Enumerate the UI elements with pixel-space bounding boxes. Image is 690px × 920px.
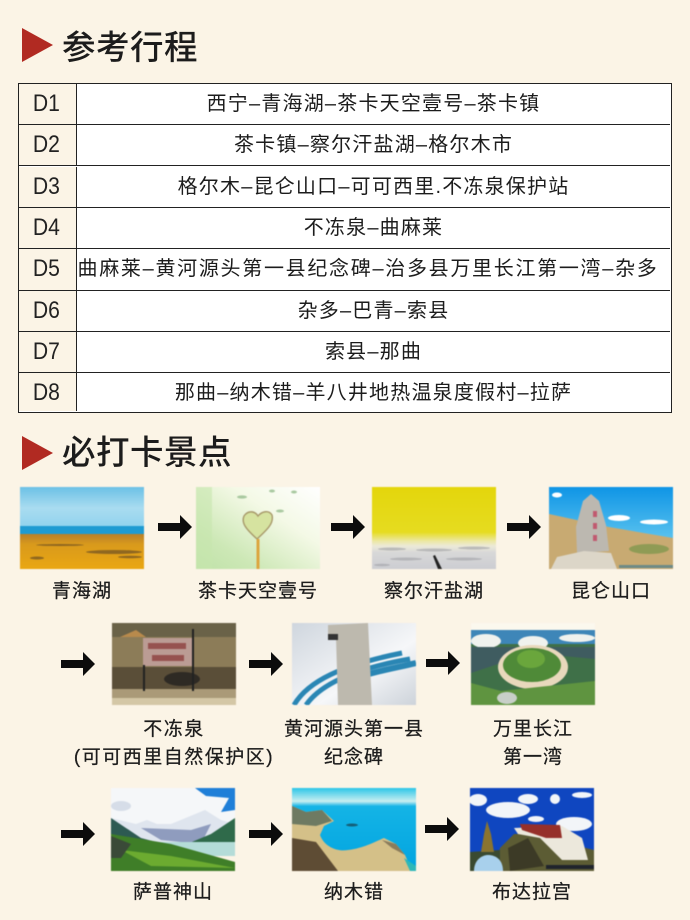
spot: 昆仑山口: 昆仑山口 — [571, 581, 651, 602]
row D5 — [19, 249, 670, 291]
spot: 萨普神山 — [110, 787, 236, 903]
spot: 黄河源头第一县纪念碑 — [284, 622, 424, 768]
row D7 — [19, 332, 670, 373]
spot: 万里长江第一湾: 第一湾 — [503, 746, 563, 768]
arrow — [61, 822, 95, 846]
spot: 布达拉宫: 布达拉宫 — [492, 882, 572, 903]
spot: 察尔汗盐湖: 察尔汗盐湖 — [384, 581, 484, 602]
spot: 不冻泉 — [74, 622, 274, 768]
row D5: D5 — [32, 255, 60, 282]
row D3 — [19, 167, 670, 208]
spot: 黄河源头第一县纪念碑: 纪念碑 — [324, 746, 384, 768]
row D8: D8 — [32, 379, 60, 406]
spot: 昆仑山口 — [548, 486, 674, 602]
arrow — [331, 515, 365, 539]
spot: 察尔汗盐湖 — [371, 486, 497, 602]
row D6 — [19, 291, 670, 332]
arrow — [507, 515, 541, 539]
row D2: D2 — [32, 131, 60, 158]
arrow — [249, 652, 283, 676]
row D4: 不冻泉–曲麻莱 — [304, 217, 443, 239]
row D4 — [19, 208, 670, 249]
spot: 萨普神山: 萨普神山 — [133, 882, 213, 903]
row D6: 杂多–巴青–索县 — [298, 300, 449, 322]
row D7: D7 — [32, 338, 60, 365]
spot: 茶卡天空壹号: 茶卡天空壹号 — [198, 581, 318, 602]
row D1: 西宁–青海湖–茶卡天空壹号–茶卡镇 — [207, 93, 540, 115]
itinerary table — [18, 83, 672, 413]
row D3: 格尔木–昆仑山口–可可西里.不冻泉保护站 — [178, 176, 569, 198]
row D2: 茶卡镇–察尔汗盐湖–格尔木市 — [234, 134, 513, 156]
spot: 茶卡天空壹号 — [196, 486, 320, 602]
spot: 青海湖 — [19, 486, 145, 602]
row D2 — [19, 125, 670, 166]
spot: 布达拉宫 — [469, 787, 595, 903]
spot: 万里长江第一湾: 万里长江 — [493, 719, 573, 740]
heading: 必打卡景点: 必打卡景点 — [62, 435, 232, 472]
row D4: D4 — [32, 214, 60, 241]
spot: 纳木错: 纳木错 — [324, 882, 384, 903]
arrow — [426, 651, 460, 675]
heading: 参考行程: 参考行程 — [62, 30, 198, 67]
spot: 黄河源头第一县纪念碑: 黄河源头第一县 — [284, 719, 424, 740]
arrow — [61, 652, 95, 676]
arrow — [158, 515, 192, 539]
row D8: 那曲–纳木错–羊八井地热温泉度假村–拉萨 — [175, 382, 572, 404]
row D1 — [19, 84, 670, 125]
spot: 万里长江第一湾 — [470, 629, 596, 768]
spot: 不冻泉: 不冻泉 — [143, 719, 205, 740]
row D8 — [19, 373, 572, 411]
spot: 不冻泉: (可可西里自然保护区) — [74, 746, 274, 768]
arrow — [249, 822, 283, 846]
spot: 纳木错 — [291, 787, 417, 903]
row D6: D6 — [32, 297, 60, 324]
row D5: 曲麻莱–黄河源头第一县纪念碑–治多县万里长江第一湾–杂多 — [78, 258, 658, 280]
spot: 青海湖: 青海湖 — [52, 581, 112, 602]
row D7: 索县–那曲 — [325, 341, 422, 363]
arrow — [425, 817, 459, 841]
row D1: D1 — [32, 90, 60, 117]
row D3: D3 — [32, 173, 60, 200]
